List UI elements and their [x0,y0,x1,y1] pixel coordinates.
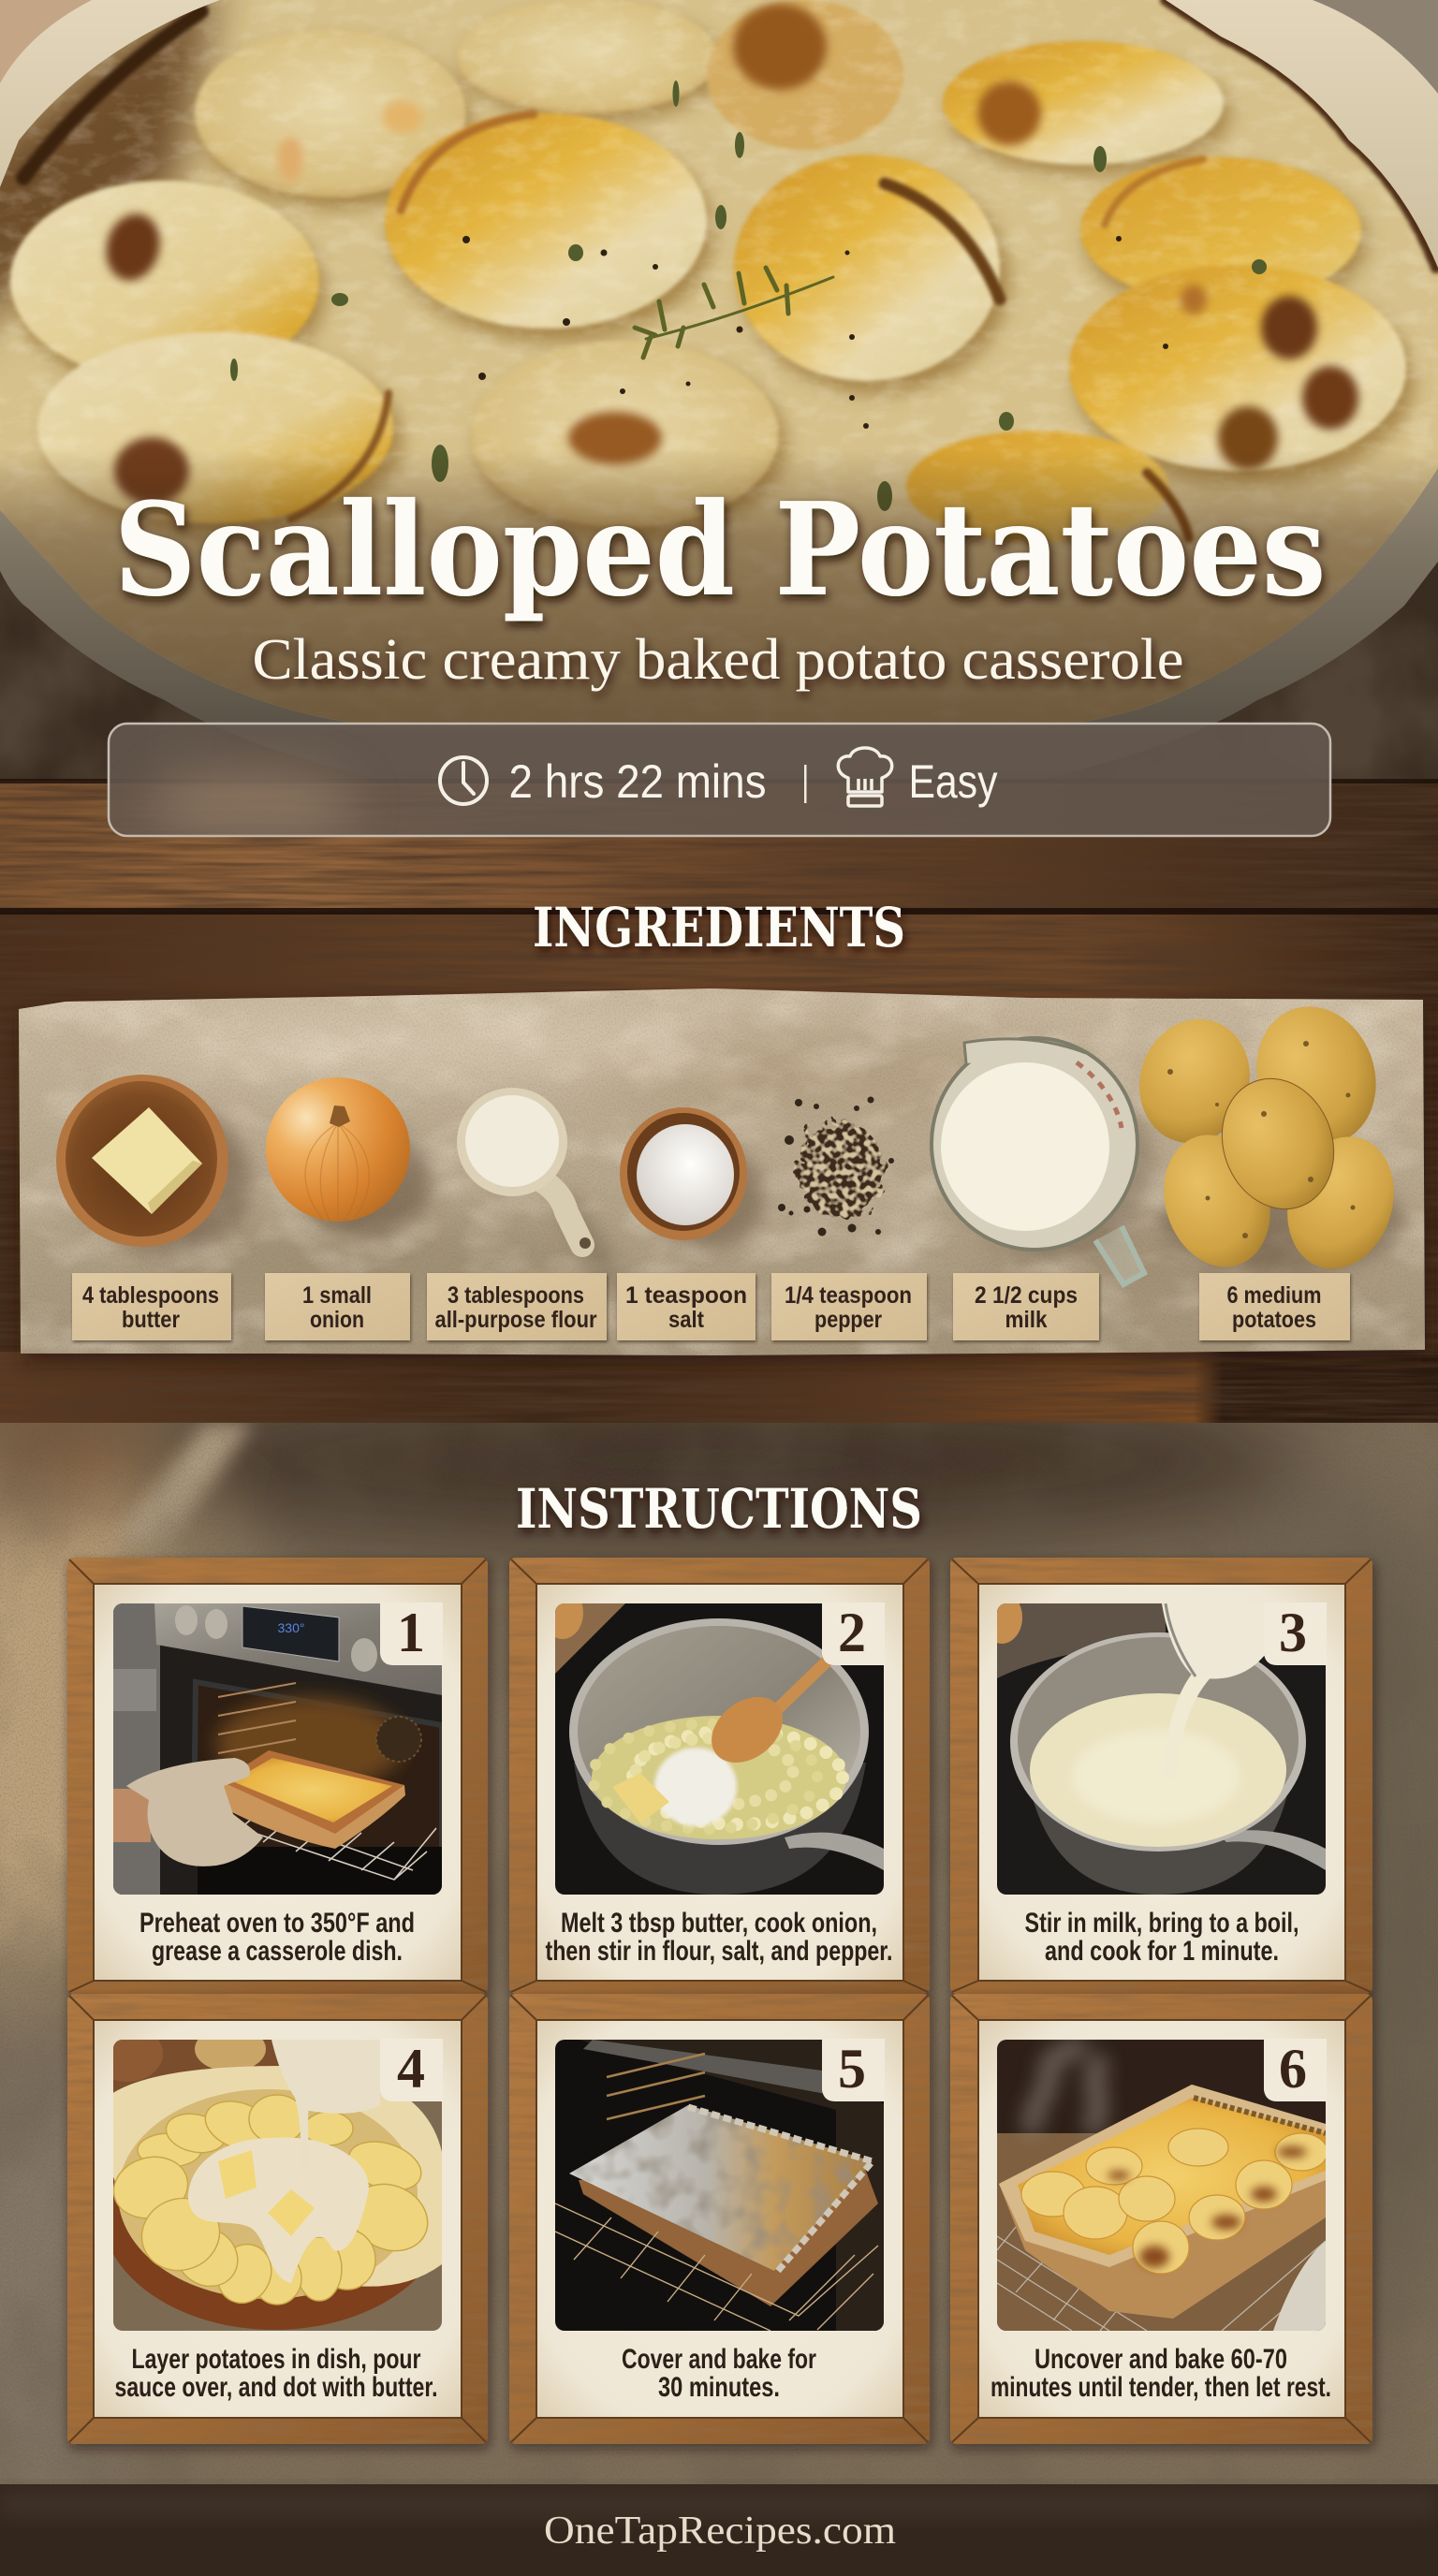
ingredient: salt [620,1107,765,1248]
step 5 text: Cover and bake for [622,2344,816,2375]
divider [804,765,807,803]
step 4 text: Layer potatoes in dish, pour [131,2344,421,2375]
step 5 photo: foil covered dish [555,2038,885,2331]
label: onion: onion [310,1307,364,1333]
step 3 text: and cook for 1 minute. [1045,1936,1279,1967]
step 6 text: Uncover and bake 60-70 [1034,2344,1287,2375]
subtitle: Classic creamy baked potato casserole [253,628,1183,692]
label: flour: 3 tablespoons [448,1282,584,1309]
instructions section linen background [0,1376,1438,2490]
label: onion [265,1273,410,1340]
step 6 photo: baked casserole [997,2038,1328,2331]
label: milk: milk [1005,1307,1048,1333]
title: Scalloped Potatoes [114,475,1326,625]
number badge 4 [380,2038,443,2101]
ingredient: flour [457,1088,623,1296]
melted cream texture [0,0,1438,637]
step card 3 [950,1558,1372,1994]
step 4 photo: layering potatoes [92,2026,448,2331]
label: butter: 4 tablespoons [82,1282,219,1309]
label: potatoes: 6 medium [1226,1282,1322,1309]
number badge 5 [822,2038,885,2101]
step 1 photo: oven [113,1602,443,1895]
icon: chef hat [838,748,892,806]
heading: ingredients: INGREDIENTS [533,896,905,959]
label: milk [953,1273,1099,1340]
label: flour: all-purpose flour [434,1307,597,1333]
footer site name: OneTapRecipes.com [544,2510,896,2553]
label: salt: 1 teaspoon [625,1282,747,1309]
ingredient: potatoes [1123,989,1411,1282]
step 1 text: grease a casserole dish. [152,1936,403,1967]
label: pepper: 1/4 teaspoon [785,1282,912,1309]
herb sprig [635,268,833,358]
pepper specks and herbs [462,236,1168,429]
step 6 text [990,2344,1331,2403]
number badge 3 [1264,1602,1327,1665]
step card 4 [67,1994,488,2444]
hero: casserole photo [0,0,1438,805]
panel: ingredients cloth [19,988,1428,1363]
label: pepper [771,1273,927,1340]
step 1 text: Preheat oven to 350°F and [139,1908,415,1939]
step 3 photo: milk pour [981,1591,1327,1895]
difficulty: Easy [908,755,998,808]
time and difficulty bar [109,724,1330,842]
number badge 6: 6 [1279,2038,1307,2100]
footer bar [0,2484,1438,2576]
step 2 text: Melt 3 tbsp butter, cook onion, [561,1908,877,1939]
label: potatoes: potatoes [1232,1307,1316,1333]
ingredients section wood background [0,779,1438,1423]
step 1 text [139,1908,415,1967]
step card 2 [509,1558,930,1994]
label: pepper: pepper [814,1307,882,1333]
step 5 text [622,2344,816,2403]
number badge 3: 3 [1279,1602,1307,1663]
step 3 text: Stir in milk, bring to a boil, [1024,1908,1299,1939]
step 4 text: sauce over, and dot with butter. [114,2372,438,2403]
ingredient: pepper [778,1097,894,1236]
number badge 5: 5 [838,2038,866,2100]
step 4 text [114,2344,438,2403]
label: salt [617,1273,756,1340]
number badge 2: 2 [838,1602,866,1663]
step 3 text [1024,1908,1299,1967]
heading: instructions: INSTRUCTIONS [516,1477,922,1541]
number badge 6 [1264,2038,1327,2101]
step 2 text [545,1908,893,1967]
step 5 text: 30 minutes. [658,2372,780,2403]
step card 5 [509,1994,930,2444]
ingredient: milk [932,1038,1154,1284]
number badge 4: 4 [397,2038,425,2100]
step card 1 [67,1558,488,1994]
casserole dish rim [0,0,1438,782]
label: butter: butter [122,1307,180,1333]
ingredient: onion [266,1077,433,1237]
label: potatoes [1199,1273,1350,1340]
label: salt: salt [668,1307,705,1333]
number badge 1 [380,1602,443,1665]
cook time: 2 hrs 22 mins [509,755,766,808]
label: onion: 1 small [302,1282,372,1309]
step 6 text: minutes until tender, then let rest. [990,2372,1331,2403]
step card 6 [950,1994,1372,2444]
number badge 1: 1 [397,1602,425,1663]
casserole food [0,0,1438,749]
browned edges [23,0,1436,538]
label: flour [427,1273,607,1340]
step 2 text: then stir in flour, salt, and pepper. [545,1936,893,1967]
number badge 2 [822,1602,885,1665]
ingredient: butter [56,1075,251,1256]
icon: clock [440,757,487,804]
label: milk: 2 1/2 cups [975,1282,1078,1309]
step 2 photo: saucepan with onion and flour [542,1587,885,1895]
step 1 photo: oven: 330° [278,1620,304,1635]
label: butter [72,1273,231,1340]
